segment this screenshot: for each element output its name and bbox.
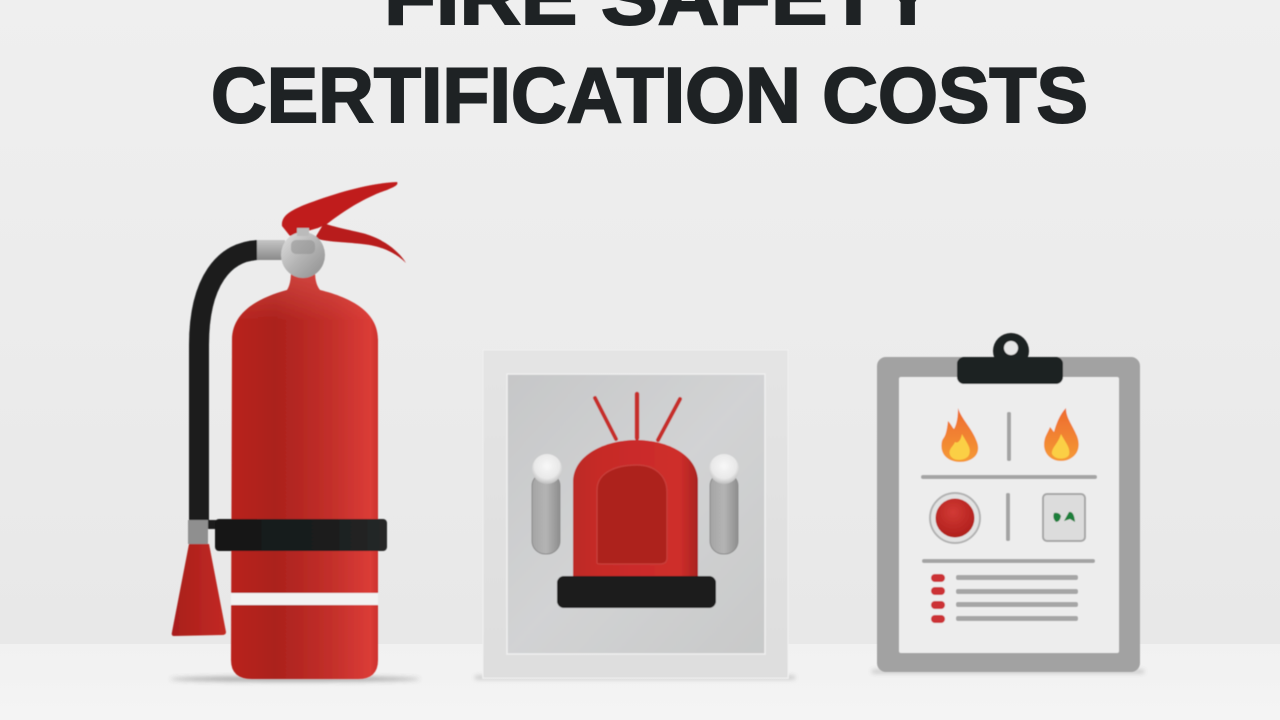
left switch body	[532, 473, 560, 554]
valve pin	[297, 228, 309, 236]
hose	[199, 250, 260, 522]
cylinder	[231, 272, 378, 679]
rule 2	[922, 559, 1095, 563]
divider bottom	[1006, 493, 1010, 541]
alarm ray centre	[635, 394, 639, 438]
clip	[957, 357, 1063, 384]
cylinder highlight	[231, 272, 378, 679]
line 1	[956, 575, 1078, 580]
floor	[0, 644, 1280, 720]
flame right inner	[1052, 434, 1069, 459]
dome inset	[597, 465, 667, 564]
strap	[215, 519, 387, 551]
hose collar	[257, 240, 285, 260]
valve	[281, 232, 325, 278]
clipboard shadow	[872, 670, 1144, 673]
flame left inner	[950, 434, 970, 460]
flame right outer	[1044, 408, 1079, 461]
valve reflection	[291, 240, 315, 254]
panel: alarm	[475, 350, 795, 679]
icon: red button	[936, 498, 974, 538]
alarm ray left	[595, 398, 616, 439]
title	[211, 0, 1088, 139]
alarm ray right	[658, 399, 680, 440]
flame left outer	[941, 408, 978, 462]
rule 1	[921, 475, 1097, 479]
strap link	[207, 520, 219, 529]
upper lever	[282, 182, 397, 236]
icon: red button ring	[930, 493, 980, 543]
alarm panel shadow	[475, 676, 795, 679]
bullet 4	[931, 615, 945, 623]
right switch body	[710, 473, 738, 554]
icon: status box	[1043, 494, 1085, 541]
line 3	[956, 602, 1078, 607]
dome	[573, 440, 698, 578]
lower lever	[315, 223, 406, 263]
clipboard board	[877, 357, 1140, 672]
title line 2: CERTIFICATION COSTS	[211, 51, 1088, 139]
nozzle cone	[172, 544, 226, 636]
extinguisher ground shadow	[170, 676, 420, 682]
clipboard paper	[899, 377, 1119, 653]
line 2	[956, 589, 1078, 594]
bullet 3	[931, 601, 945, 609]
alarm base	[557, 576, 716, 608]
right switch ball	[709, 454, 739, 484]
icon: fire extinguisher	[170, 182, 420, 682]
bullet 1	[931, 574, 945, 582]
alarm inner plate	[507, 374, 765, 654]
icon: flame left	[941, 408, 978, 462]
icon: green marks	[1053, 512, 1075, 522]
alarm outer frame	[483, 350, 788, 678]
icon: flame right	[1044, 408, 1079, 461]
line 4	[956, 616, 1078, 621]
clip loop	[993, 333, 1029, 369]
nozzle ferrule	[188, 520, 208, 544]
left switch ball	[532, 454, 562, 484]
divider top	[1007, 412, 1011, 461]
clip hole	[1004, 341, 1018, 355]
panel: clipboard checklist	[872, 333, 1144, 673]
bullet 2	[931, 587, 945, 595]
white stripe	[231, 593, 378, 605]
